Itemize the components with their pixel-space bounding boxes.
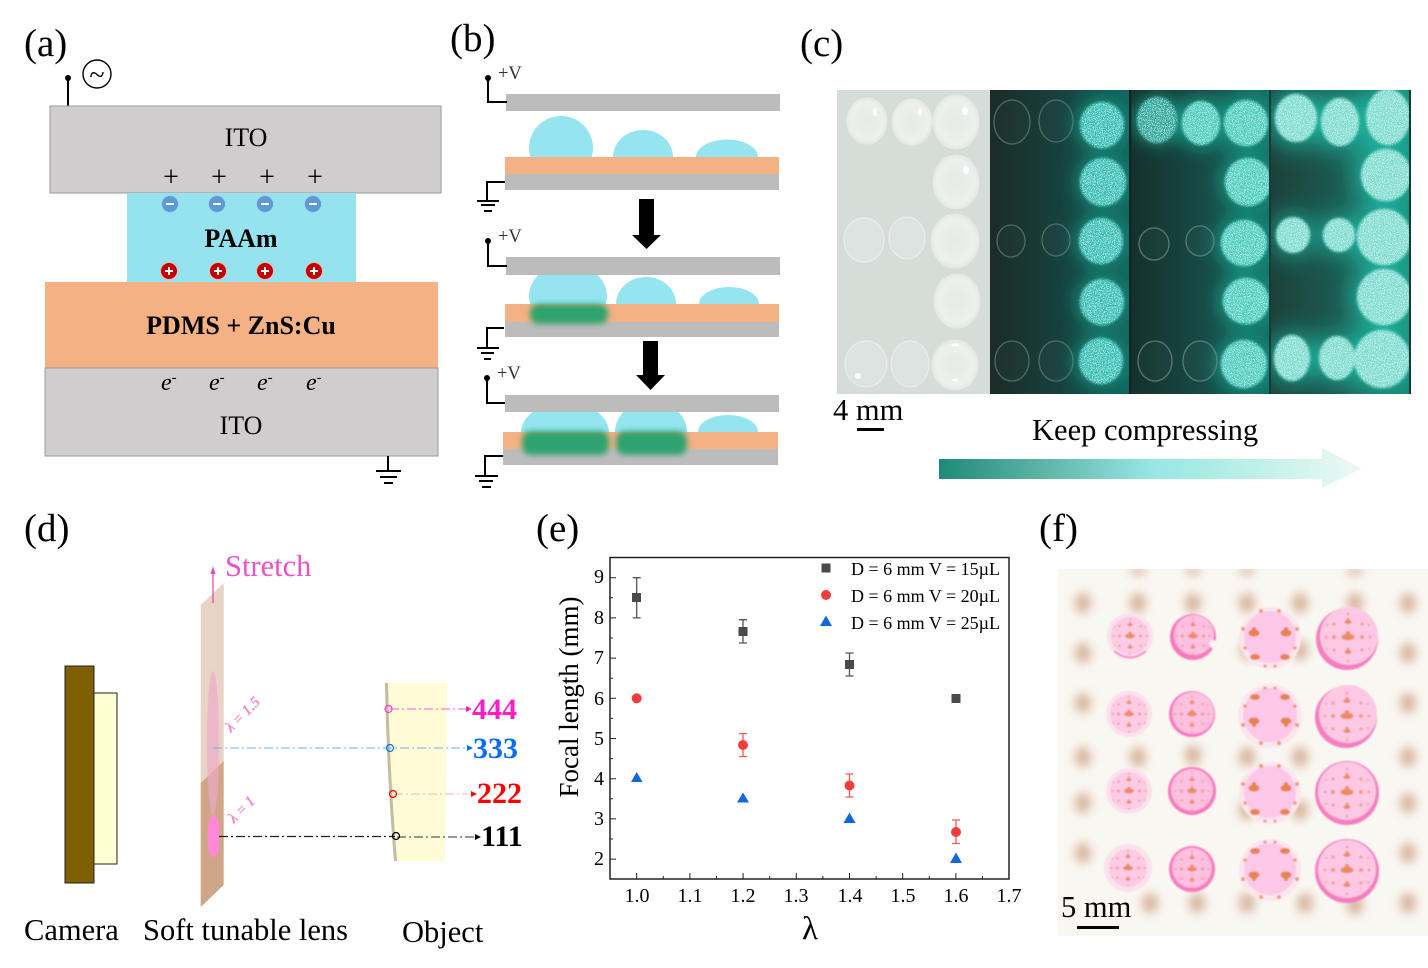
electrons: - [220,370,225,386]
plot frame and ticks [610,558,1009,879]
photo step 1 [990,90,1130,394]
x axis tick labels: 1.0 [624,885,650,907]
legend: D = 6 mm V = 25µL [851,613,1000,633]
panel label (d): (d) [24,507,69,550]
state 3 [475,364,779,487]
y axis tick labels: 7 [594,647,604,669]
top electrode and wire [485,227,780,275]
electrons: e [257,370,268,396]
panel e: scatter chart of focal length [554,558,1022,947]
photo step 2 [1130,90,1276,394]
panel label (a): (a) [24,22,67,65]
electrons: e [161,370,172,396]
series V=25 [631,772,962,863]
object sheet [385,683,447,861]
electrons: - [317,370,322,386]
series V=15 [632,578,960,703]
panel c: photo sequence [837,85,1420,394]
photo step 3 [1271,90,1409,394]
ray markers [385,706,400,840]
ray lines [213,709,475,837]
electrons: e [209,370,220,396]
image label 111: 111 [481,820,523,853]
PDMS + ZnS:Cu layer [45,282,438,368]
x axis tick labels: 1.1 [678,885,702,907]
x axis tick labels: 1.5 [890,885,916,907]
panel label (f): (f) [1039,507,1078,550]
camera [65,666,117,883]
top electrode and wire: +V [498,64,522,84]
x axis tick labels: 1.7 [996,885,1022,907]
luminescent regions [522,431,687,455]
top electrode and wire [485,64,780,111]
panel label (e): (e) [536,507,579,550]
legend: D = 6 mm V = 20µL [851,586,1000,606]
wire and AC source [65,60,111,106]
scale bar 5 mm: 5 mm [1061,890,1132,924]
panel label (c): (c) [800,22,843,65]
electrons: e [306,370,317,396]
electrons: - [172,370,177,386]
PDMS + ZnS:Cu layer: PDMS + ZnS:Cu [146,311,336,340]
electrons: - [268,370,273,386]
x axis title: λ [802,911,818,947]
electrons [161,370,322,396]
caption lens: Soft tunable lens [143,913,348,947]
substrate layers and ground [477,304,779,359]
bottom ITO layer: ITO [220,411,262,440]
ground symbol [376,456,401,483]
y axis tick labels: 6 [594,688,604,710]
caption camera: Camera [24,913,119,947]
substrate layers and ground [475,432,778,487]
substrate layers and ground [477,157,779,211]
scale bar 5 mm [1062,897,1131,929]
wire and AC source: ~ [89,60,105,91]
soft tunable lens sheet [201,583,224,907]
liquid drops [521,412,758,432]
down arrow 1 [632,199,661,249]
y axis tick labels: 5 [594,728,604,750]
y axis tick labels: 3 [594,808,604,830]
strain labels: λ = 1 [224,793,259,828]
ray arrowheads [466,706,481,840]
column 3 lenses [1238,607,1302,901]
x axis tick labels: 1.4 [838,885,862,907]
positive charges [163,162,323,193]
luminescent region [530,304,608,324]
panel d: imaging setup [24,549,523,949]
x axis tick labels: 1.3 [784,885,808,907]
PAAm layer [127,193,356,282]
image label 444: 444 [472,693,517,726]
y axis tick labels: 4 [594,768,604,790]
column 1 lenses [1104,613,1153,892]
caption object: Object [402,915,484,949]
y axis tick labels: 9 [594,566,604,588]
x axis tick labels [624,885,1022,907]
caption: Keep compressing: Keep compressing [1032,413,1258,447]
down arrow 2 [636,341,665,390]
column 4 lenses [1315,607,1379,903]
legend: D = 6 mm V = 15µL [851,559,1000,579]
liquid drops [529,116,758,184]
image label 222: 222 [477,777,522,810]
top ITO layer [50,106,441,193]
state 1 [477,64,780,211]
gradient arrow [939,448,1362,488]
liquid drops [529,275,759,304]
top electrode and wire [484,364,779,412]
positive charges: + [259,162,275,193]
panel f: lens array photo [1058,567,1428,936]
top ITO layer: ITO [225,123,267,152]
state 2 [477,227,780,359]
positive charges: + [211,162,227,193]
photo under ambient light [837,90,990,394]
column 2 lenses [1168,614,1217,892]
blurred background dots [1075,567,1416,915]
panel label (b): (b) [450,17,495,60]
series V=20 [632,693,961,844]
positive charges: + [163,162,179,193]
y axis tick labels: 2 [594,848,604,870]
y axis tick labels [594,566,604,870]
stretch arrow and label [210,549,311,603]
scale bar 4 mm: 4 mm [833,393,904,427]
strain labels: λ = 1.5 [221,693,264,737]
y axis tick labels: 8 [594,607,604,629]
stretch arrow and label: Stretch [225,549,311,583]
x axis tick labels: 1.6 [944,885,968,907]
image label 333: 333 [473,732,518,765]
strain labels [221,693,264,828]
panel b: compression sequence [475,64,780,487]
top electrode and wire: +V [497,364,521,384]
legend [820,559,1000,633]
positive charges: + [307,162,323,193]
negative ions [162,196,322,212]
bottom ITO layer [45,368,438,456]
photo dividers [1130,90,1410,394]
top electrode and wire: +V [498,227,522,247]
photo background [1058,569,1428,936]
y axis title: Focal length (mm) [554,597,584,797]
positive ions [160,262,322,280]
PAAm layer: PAAm [204,224,278,253]
x axis tick labels: 1.2 [730,885,756,907]
panel a: device cross-section [45,60,441,483]
